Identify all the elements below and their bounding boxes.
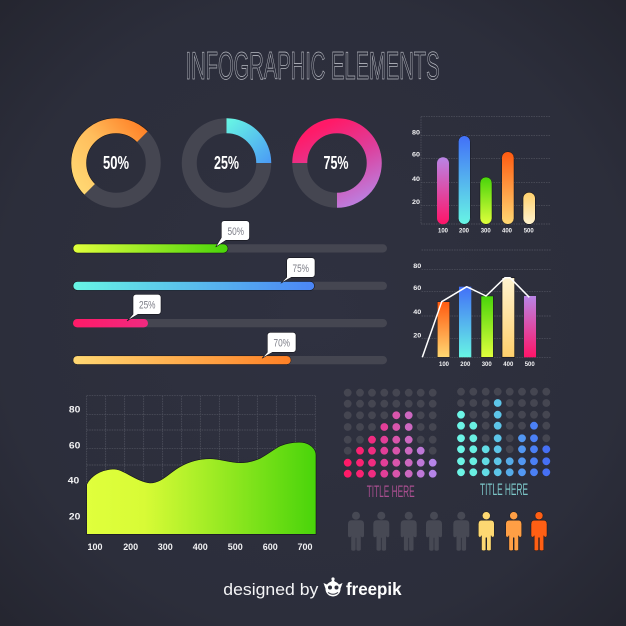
- donut chart: 25%: [189, 126, 264, 200]
- rounded bar chart: 200: [459, 228, 469, 235]
- rounded bar chart: 300: [481, 228, 491, 235]
- bar and line combo chart: 300: [482, 361, 492, 368]
- area chart: 400: [193, 542, 208, 553]
- rounded bar chart: 400: [502, 228, 512, 235]
- area chart: 300: [158, 542, 173, 553]
- bar and line combo chart: 500: [525, 361, 535, 368]
- bar and line combo chart: [413, 250, 551, 368]
- label: teal title: TITLE HERE: [480, 481, 528, 499]
- bar and line combo chart: 200: [460, 361, 471, 368]
- rounded bar chart: [412, 117, 551, 235]
- bar and line combo chart: 80: [413, 263, 422, 270]
- bar and line combo chart: 20: [413, 332, 422, 339]
- footer: designed by freepik: freepik: [346, 579, 402, 599]
- donut chart: 25%: 25%: [214, 153, 239, 173]
- progress bar: 70%: [73, 332, 387, 364]
- progress bar: 25%: [73, 294, 387, 327]
- progress bar: 75%: 75%: [292, 263, 309, 275]
- area chart: 100: [88, 542, 102, 553]
- rounded bar chart: 80: [412, 130, 420, 137]
- progress bar: 70%: 70%: [274, 337, 290, 349]
- rounded bar chart: 40: [412, 176, 420, 183]
- area chart: 700: [298, 542, 312, 553]
- rounded bar chart: 60: [412, 151, 420, 158]
- progress bar: 75%: [73, 258, 387, 290]
- progress bar: 50%: [73, 221, 387, 253]
- icon: freepik mascot: [324, 577, 342, 596]
- area chart: 500: [228, 542, 243, 553]
- area chart: 40: [68, 476, 79, 487]
- donut chart: 50%: [79, 126, 153, 200]
- area chart: 600: [263, 542, 278, 553]
- area chart: 20: [69, 512, 80, 523]
- dot matrix chart: pink: [344, 389, 437, 501]
- progress bar: 50%: 50%: [228, 226, 244, 238]
- pictogram row: people: [348, 512, 547, 551]
- area chart: [68, 396, 316, 553]
- footer: designed by freepik: designed by: [223, 580, 319, 599]
- bar and line combo chart: 100: [439, 361, 449, 368]
- rounded bar chart: 100: [438, 228, 448, 235]
- area chart: 60: [69, 440, 80, 451]
- rounded bar chart: 500: [524, 228, 534, 235]
- dot matrix chart: teal and blue: [457, 388, 550, 499]
- bar and line combo chart: 400: [503, 361, 514, 368]
- footer: designed by freepik: [223, 577, 402, 599]
- donut chart: 75%: [300, 126, 374, 200]
- area chart: 80: [69, 404, 80, 415]
- donut chart: 75%: 75%: [324, 153, 348, 173]
- label: pink title: TITLE HERE: [367, 483, 415, 501]
- donut chart: 50%: 50%: [103, 153, 129, 173]
- bar and line combo chart: 60: [413, 285, 422, 292]
- progress bar: 25%: 25%: [139, 299, 156, 311]
- rounded bar chart: 20: [412, 199, 420, 206]
- area chart: 200: [123, 542, 138, 553]
- bar and line combo chart: 40: [413, 309, 422, 316]
